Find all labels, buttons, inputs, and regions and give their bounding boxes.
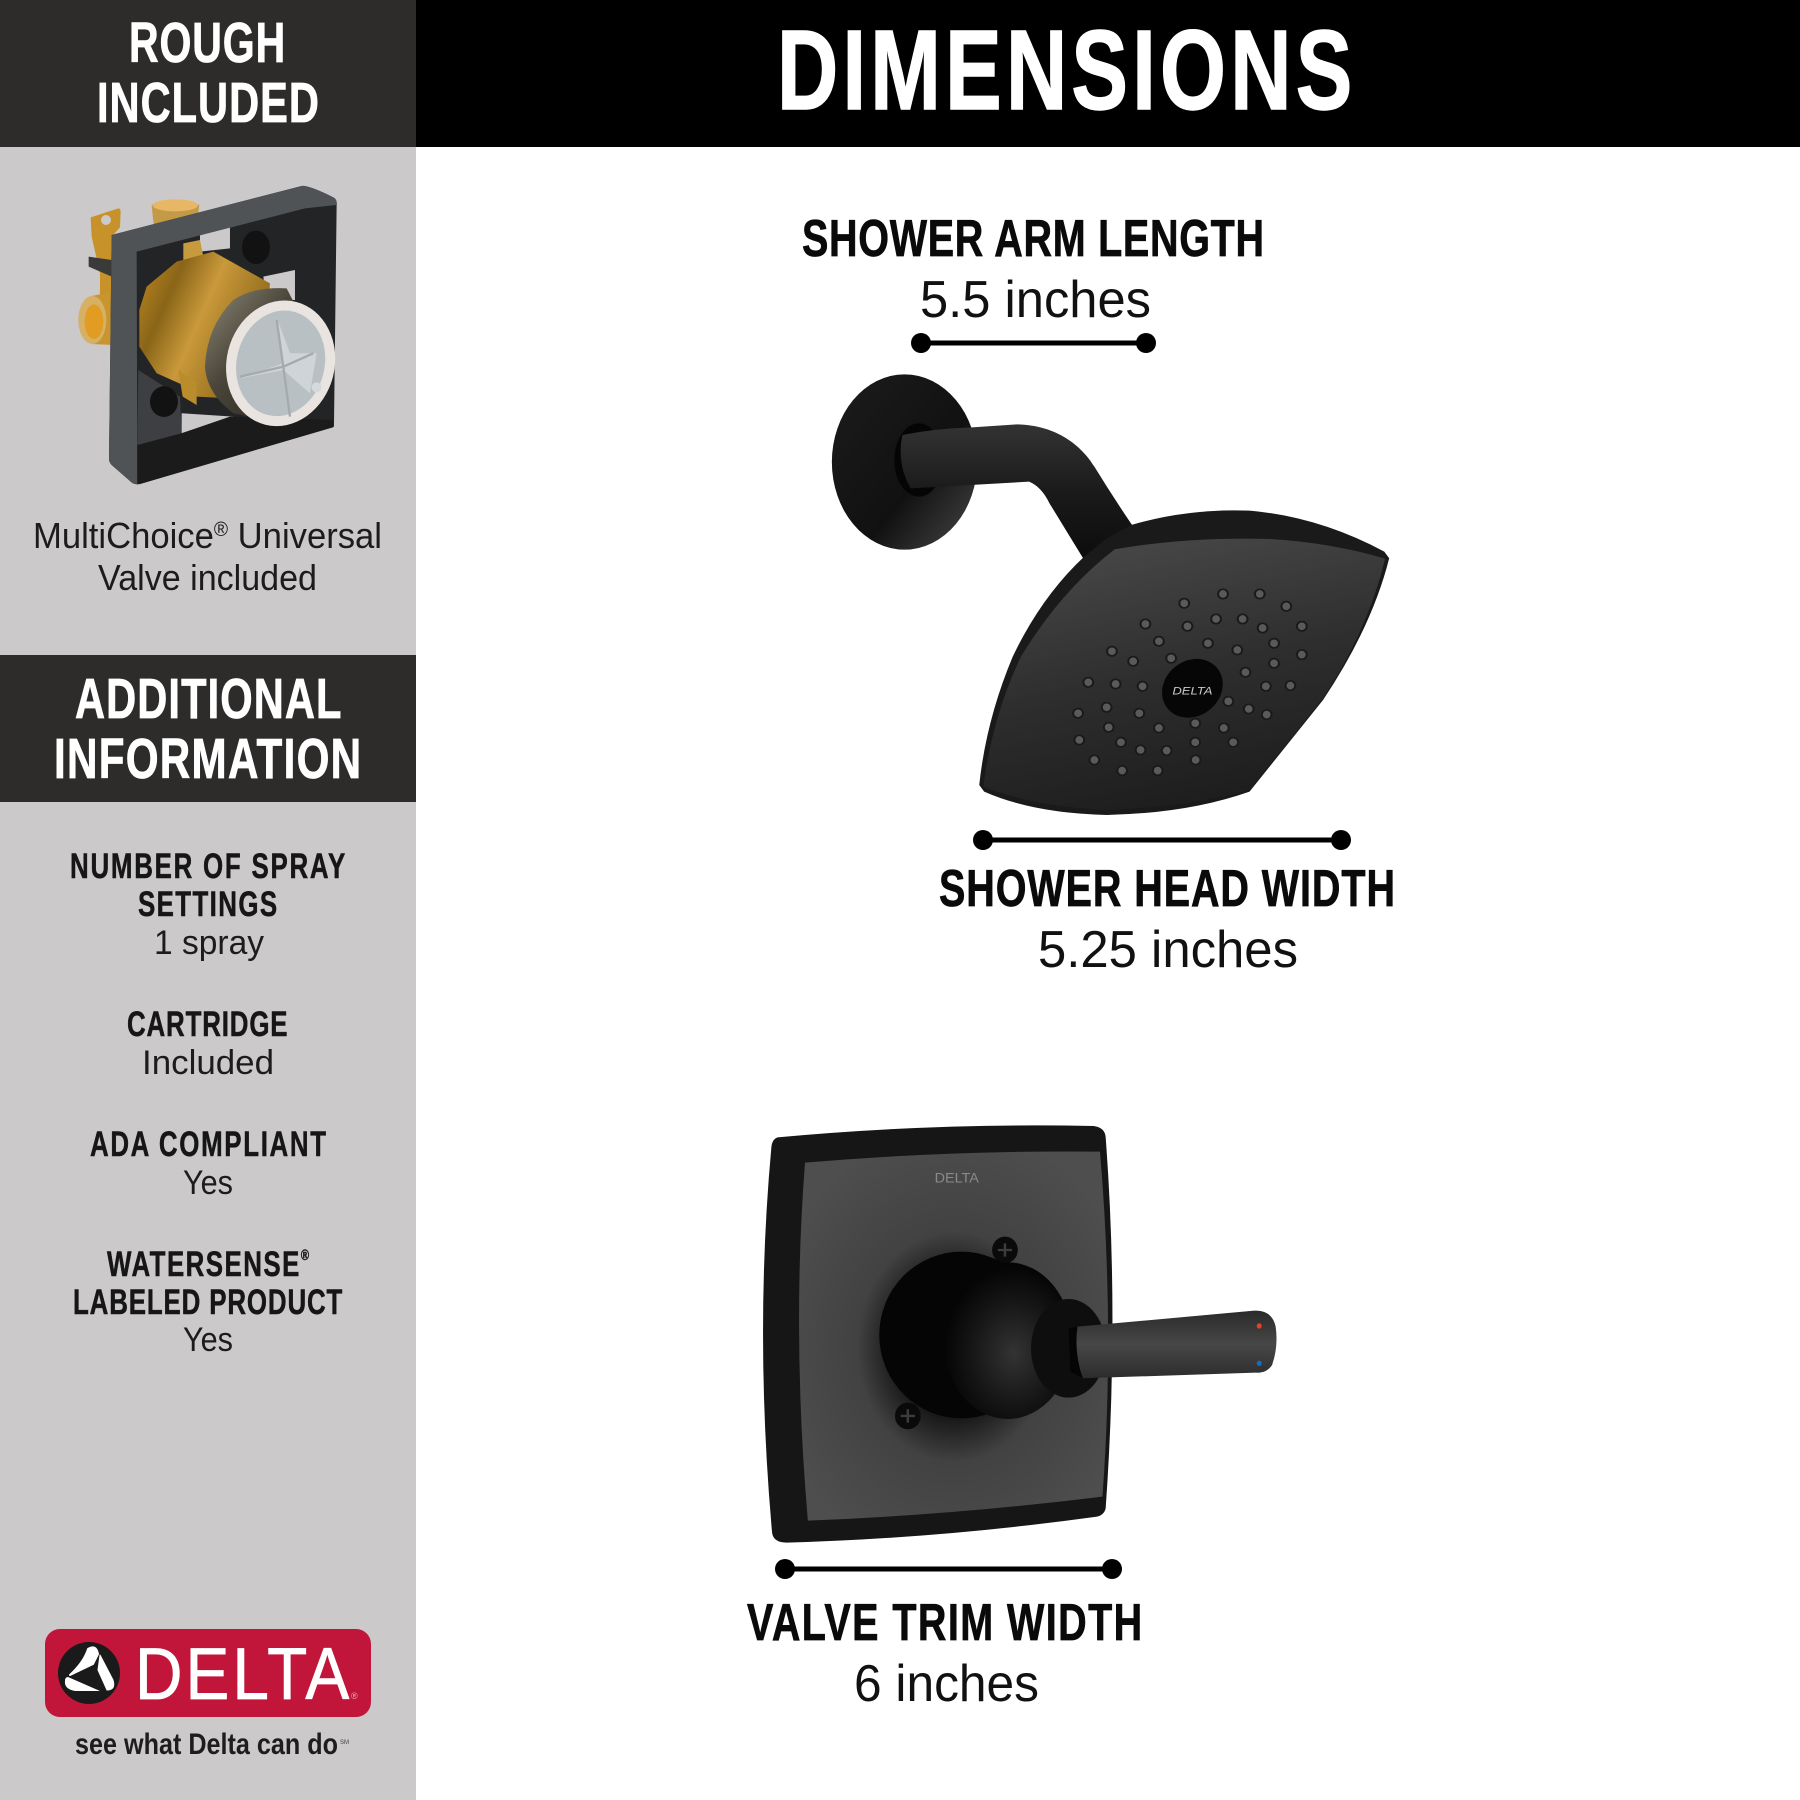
black mount: lower screw: [150, 386, 178, 417]
lower window gap: [182, 413, 233, 433]
brass: inner pipe: [183, 240, 203, 263]
lever collar: [1069, 1326, 1083, 1378]
knob front: [944, 1262, 1072, 1419]
wall flange: [832, 374, 977, 550]
service mark: SM: [340, 1740, 349, 1746]
dimension: shower head width: [939, 859, 1395, 979]
spec: watersense labeled product: WATERSENSE: [107, 1244, 299, 1284]
trim plate bezel: [763, 1125, 1112, 1543]
spec: ADA compliant: ADA COMPLIANT: [90, 1124, 326, 1164]
header: rough included: [0, 0, 416, 147]
text: MultiChoice Universal Valve included: MultiChoice: [33, 515, 221, 556]
brass: left pipe: [92, 292, 113, 345]
title: DIMENSIONS: DIMENSIONS: [777, 8, 1352, 134]
spec: watersense labeled product: Yes: [183, 1321, 233, 1359]
center cap with DELTA: DELTA: [1172, 685, 1212, 697]
text: MultiChoice Universal Valve included: ®: [214, 519, 228, 541]
panel: left sidebar background: [0, 0, 416, 1800]
spec: number of spray settings: SETTINGS: [138, 884, 277, 924]
spec: cartridge: [127, 1004, 288, 1082]
black mount: upper screw: [242, 231, 270, 264]
trim plate face: [799, 1151, 1108, 1521]
shower head body: [979, 510, 1389, 815]
header: dimensions banner: [416, 0, 1800, 147]
registered mark: ®: [351, 1691, 358, 1701]
heading: rough included text: [97, 10, 319, 135]
spec: watersense labeled product: ®: [301, 1246, 309, 1263]
product: shower head and arm: [832, 374, 1389, 815]
measure line: valve trim width: [775, 1559, 1122, 1579]
header: additional information: [0, 655, 416, 802]
upper screw: [992, 1237, 1018, 1263]
DELTA mark: DELTA: [935, 1171, 979, 1186]
cold indicator: [1257, 1361, 1262, 1366]
shower arm: [901, 424, 1133, 560]
spray nozzles: [1073, 589, 1307, 775]
measure line: shower head width: [973, 830, 1351, 850]
spec: ADA compliant: [90, 1124, 326, 1202]
wordmark: DELTA: DELTA: [135, 1633, 350, 1715]
dimension: shower arm length: [802, 209, 1264, 353]
handle neck: [1031, 1299, 1106, 1398]
lever: [1076, 1311, 1277, 1378]
tagline: see what Delta can do: [75, 1728, 338, 1761]
text: MultiChoice Universal Valve included: Valve included: [98, 557, 317, 598]
spec: number of spray settings: [70, 846, 346, 962]
plaster guard ring: [213, 289, 348, 438]
shower head face: [983, 539, 1385, 810]
dimension: shower arm length: SHOWER ARM LENGTH: [802, 209, 1264, 267]
brass: valve body: [139, 252, 270, 400]
brass: top pipe: [152, 201, 200, 263]
spec: number of spray settings: NUMBER OF SPRAY: [70, 846, 346, 886]
product: valve trim: [763, 1125, 1277, 1543]
text: MultiChoice Universal Valve included: Universal: [228, 515, 382, 556]
heading: rough included text: INCLUDED: [97, 71, 319, 135]
center cap with DELTA: [1152, 652, 1233, 725]
dimension: shower head width: 5.25 inches: [1038, 921, 1298, 979]
spec: cartridge: CARTRIDGE: [127, 1004, 288, 1044]
right window gap: [263, 270, 295, 300]
heading: additional information text: ADDITIONAL: [75, 667, 341, 731]
dimension: valve trim width: [747, 1593, 1142, 1713]
top window gap: [200, 227, 230, 252]
dimension: valve trim width: 6 inches: [854, 1655, 1039, 1713]
spec: watersense labeled product: [73, 1244, 343, 1359]
knob rear: [879, 1252, 1044, 1418]
spec: ADA compliant: Yes: [183, 1164, 233, 1202]
logo: Delta: [45, 1629, 371, 1761]
brass: lower thread: [178, 370, 197, 405]
dimension: shower arm length: 5.5 inches: [920, 271, 1151, 329]
measure line: arm: [911, 333, 1156, 353]
heading: additional information text: [54, 667, 361, 791]
heading: rough included text: ROUGH: [129, 10, 285, 75]
spec: watersense labeled product: LABELED PRODUCT: [73, 1282, 343, 1322]
icon: Delta triangle emblem: [58, 1642, 120, 1704]
brass: mounting bracket: [91, 208, 121, 297]
heading: additional information text: INFORMATION: [54, 727, 361, 791]
icon: MultiChoice universal valve: [78, 186, 348, 484]
lower screw: [895, 1403, 921, 1429]
text: MultiChoice Universal Valve included: [33, 515, 382, 598]
frame back: [109, 186, 337, 484]
frame lower depth: [137, 417, 333, 484]
chrome: valve cylinder: [205, 288, 320, 423]
dimension: shower head width: SHOWER HEAD WIDTH: [939, 859, 1395, 917]
spec: cartridge: Included: [142, 1044, 274, 1082]
hot indicator: [1257, 1323, 1262, 1329]
frame front: [109, 186, 336, 484]
dimension: valve trim width: VALVE TRIM WIDTH: [747, 1593, 1142, 1651]
spec: number of spray settings: 1 spray: [154, 924, 264, 962]
